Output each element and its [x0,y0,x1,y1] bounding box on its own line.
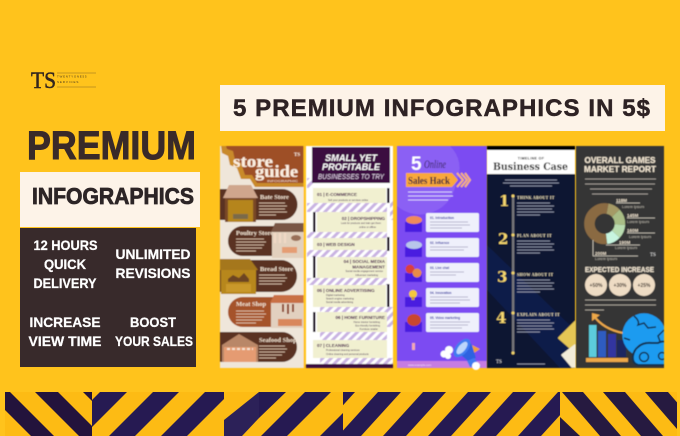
item 07: Professional cleaning services [326,349,360,352]
step 5: 05. Video marketing [430,316,460,320]
chart labels: Lorem Ipsum [627,220,649,224]
chart labels: Lorem Ipsum [615,246,637,250]
header: BUSINESSES TO TRY [318,174,385,181]
step 3: 3 [497,268,507,286]
panel: infographics label [20,172,200,227]
chart labels: Lorem Ipsum [622,205,644,209]
item 07: 07 | CLEANING [317,343,350,348]
item 05 [313,284,390,307]
row: bread store [220,259,297,294]
step 2: PLAN ABOUT IT [517,233,552,238]
panel: online sales hack [397,146,487,370]
hazard stripe band [0,392,680,436]
benefit: unlimited revisions [116,246,190,281]
item 05: Search engine marketing [326,298,354,300]
header: SMALL YET [325,153,378,164]
benefit: unlimited revisions: UNLIMITED [116,246,190,262]
benefit: quick delivery: QUICK [44,256,86,272]
row: seafood shop: Seafood Shop [259,337,297,344]
store guide title: store [233,152,274,171]
step 4: 4 [496,309,506,327]
row: bread store: Bread Store [260,266,293,273]
item 03: 03 | WEB DESIGN [317,242,355,247]
increase badges: +30% [614,283,627,289]
step 4: 04. Innovation [430,291,451,295]
item 06: Eco-friendly furnishing [355,324,381,328]
step 2: 2 [498,230,508,248]
item 06: Home interior furnishing [353,321,381,324]
benefit: unlimited revisions: REVISIONS [116,265,190,281]
donut chart [589,208,620,239]
item 02: 02 | DROPSHIPPING [342,216,385,221]
icon: megaphone [440,336,481,370]
report title [584,155,657,194]
store guide title: INFOGRAPHIC [267,179,299,183]
item 01 [313,188,390,203]
item 07 [313,340,387,358]
bar chart [586,325,628,362]
sales hack heading [406,154,470,200]
benefit: boost sales: BOOST [130,314,176,330]
benefit: view time: INCREASE [30,314,100,330]
item 07: Online cleaning and personal products [326,353,369,356]
benefit: quick delivery: DELIVERY [34,275,97,291]
panel: profitable businesses [306,146,393,368]
increase badges: +25% [638,283,651,289]
chart labels: 145M [627,213,639,218]
chart labels: 190M [619,240,631,245]
panel: games market report [576,146,666,368]
chart labels: Lorem Ipsum [629,235,651,239]
chart labels: 200M [595,251,607,256]
row: poultry store: Poultry Store [236,230,273,237]
benefit: quick delivery [34,237,98,291]
logo [31,68,96,93]
item 02: online or offline [359,226,377,229]
sales hack heading: 5 [411,154,422,175]
store guide title: TS [294,153,300,158]
row: meat shop [228,295,305,328]
panel: online sales hack: www.example.com [408,363,432,367]
item 06: 06 | HOME FURNITURE [335,315,385,320]
item 02 [313,212,387,232]
step 5 [405,313,479,332]
sales hack heading: Sales Hack [408,176,450,187]
step 1: 01. Introduction [430,216,454,220]
row: meat shop: Meat Shop [236,301,267,308]
item 04: 04 | SOCIAL MEDIA [344,259,386,264]
item 02: Look for products and train get them [341,222,381,225]
item 04: Social media engagement service [345,270,384,273]
store guide title [233,152,300,183]
benefit: boost sales [115,314,193,349]
benefit: boost sales: YOUR SALES [115,333,193,349]
benefit: view time [28,314,102,349]
step 3: 03. Live chat [430,266,450,270]
chart labels: 118M [616,198,627,203]
store guide title: guide [255,162,298,181]
item 01: 01 | E-COMMERCE [317,192,357,197]
row: first store: Bate Store [260,194,289,201]
panel: infographics label: INFOGRAPHICS [32,183,194,209]
step 3 [497,268,554,292]
header: TIMELINE OF [518,156,545,160]
header: PROFITABLE [322,162,381,173]
sales hack heading: Online [424,157,446,171]
increase badges [585,274,655,296]
step 4: EXPLAIN ABOUT IT [517,312,560,317]
row: first store [220,185,298,222]
title banner [220,85,665,131]
step 4 [496,309,560,332]
title banner: 5 PREMIUM INFOGRAPHICS IN 5$ [233,95,651,122]
item 05: Social media advertising [326,301,354,304]
step 2 [498,230,554,253]
report title: MARKET REPORT [584,164,657,174]
step 4 [405,288,479,307]
item 04 [313,256,387,278]
step 2 [405,238,479,257]
item 03 [313,237,390,251]
header [312,147,390,183]
step 1: THINK ABOUT IT [517,195,555,200]
step 1: 1 [499,192,509,210]
row: seafood shop [220,332,297,362]
heading: premium: PREMIUM [27,124,196,168]
row: poultry store [228,223,305,258]
expected increase heading: EXPECTED INCREASE [585,267,654,274]
panel: business case timeline: TS [496,360,502,365]
panel: benefits [20,228,196,367]
panel: store guide [220,146,305,368]
benefit: view time: VIEW TIME [28,333,102,349]
panel: games market report: TS [650,253,656,258]
chart labels: 160M [627,228,639,233]
chart labels [593,198,655,261]
timeline line [512,194,514,354]
item 05: Digital marketing [326,294,345,297]
item 04: MANAGEMENT [352,264,385,270]
step 3: SHOW ABOUT IT [517,272,553,277]
step 1 [499,192,555,215]
decorative diamonds [559,322,575,367]
chart labels: Lorem Ipsum [595,257,617,261]
logo: TS [31,68,56,93]
header [487,150,575,174]
step 3 [405,263,479,282]
item 06 [313,312,387,332]
benefit: quick delivery: 12 HOURS [34,237,98,253]
report title: OVERALL GAMES [584,155,656,165]
increase badges: +50% [590,283,603,289]
logo: SERVICES [57,80,79,84]
header: Business Case [493,162,568,173]
item 06: Furniture retailer [360,328,378,331]
step 1 [405,213,479,232]
growth arrow [592,313,623,333]
item 05: 05 | ONLINE ADVERTISING [317,288,375,293]
icon: globe and game controller [622,313,666,365]
item 04: Influencer marketing [355,274,379,277]
step 2: 02. Influence [430,241,450,245]
item 01: Sell your products or services online [328,199,369,202]
panel: business case timeline [487,146,575,368]
logo: TWENTYONE55 [57,74,87,78]
